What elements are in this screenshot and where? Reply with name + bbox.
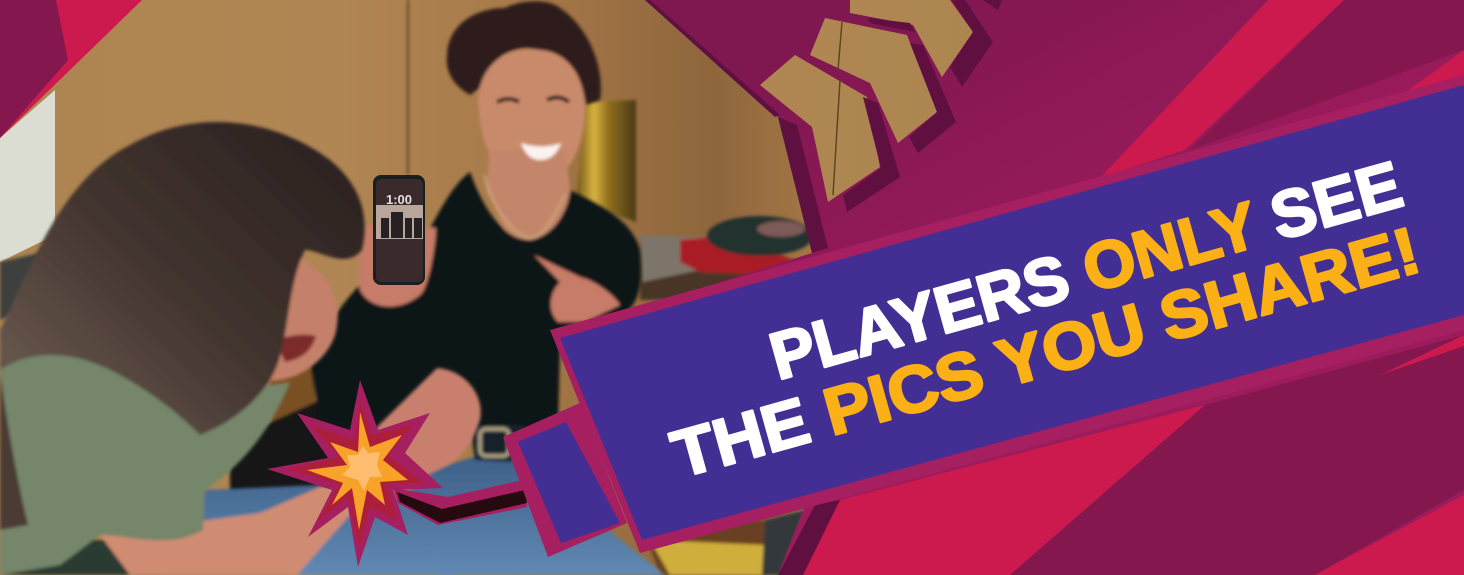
floor xyxy=(640,520,770,575)
line 1: players only see: PLAYERS ONLY SEE xyxy=(762,147,1410,393)
wall at left xyxy=(0,90,55,262)
main magenta field xyxy=(600,0,1464,575)
console shelf xyxy=(640,235,800,300)
dark edge shadows xyxy=(778,117,828,253)
necklace xyxy=(484,175,565,238)
jeans xyxy=(400,455,665,575)
gold vase xyxy=(576,100,636,222)
crimson lower band xyxy=(803,405,1205,575)
small banner handle xyxy=(503,403,627,557)
face xyxy=(478,49,585,188)
green t-shirt xyxy=(0,353,290,575)
connector tail from burst to banner xyxy=(393,480,527,525)
lower dark floor xyxy=(0,540,135,575)
woman at left xyxy=(0,122,481,575)
pointing hand xyxy=(534,255,620,322)
jeans under arm xyxy=(200,485,455,575)
cabinet seam xyxy=(407,0,409,175)
explosion starburst icon xyxy=(267,380,443,567)
woman at right xyxy=(310,1,665,575)
top left corner shape xyxy=(0,0,142,138)
record player xyxy=(680,236,800,276)
phone xyxy=(373,175,425,285)
main banner xyxy=(550,75,1464,553)
black sweater xyxy=(310,172,641,440)
hair bun and hair xyxy=(447,1,601,105)
phone: 1:00 xyxy=(386,192,412,207)
arm xyxy=(100,470,400,575)
hand holding phone xyxy=(359,225,436,306)
face xyxy=(250,255,338,381)
fist xyxy=(370,368,481,490)
cabinet seam on cutouts xyxy=(833,22,842,195)
line 2: the pics you share: THE PICS YOU SHARE! xyxy=(664,213,1427,491)
headline xyxy=(664,147,1427,491)
long hair xyxy=(0,122,365,435)
dark upper right xyxy=(1190,0,1464,150)
smile xyxy=(521,143,561,160)
dark lower right xyxy=(1010,335,1464,575)
couch back and cushion xyxy=(0,248,72,320)
crimson diagonal band top xyxy=(1100,0,1344,178)
torn wood-colored zigzag cutouts xyxy=(645,0,1002,253)
eyes xyxy=(497,97,569,102)
